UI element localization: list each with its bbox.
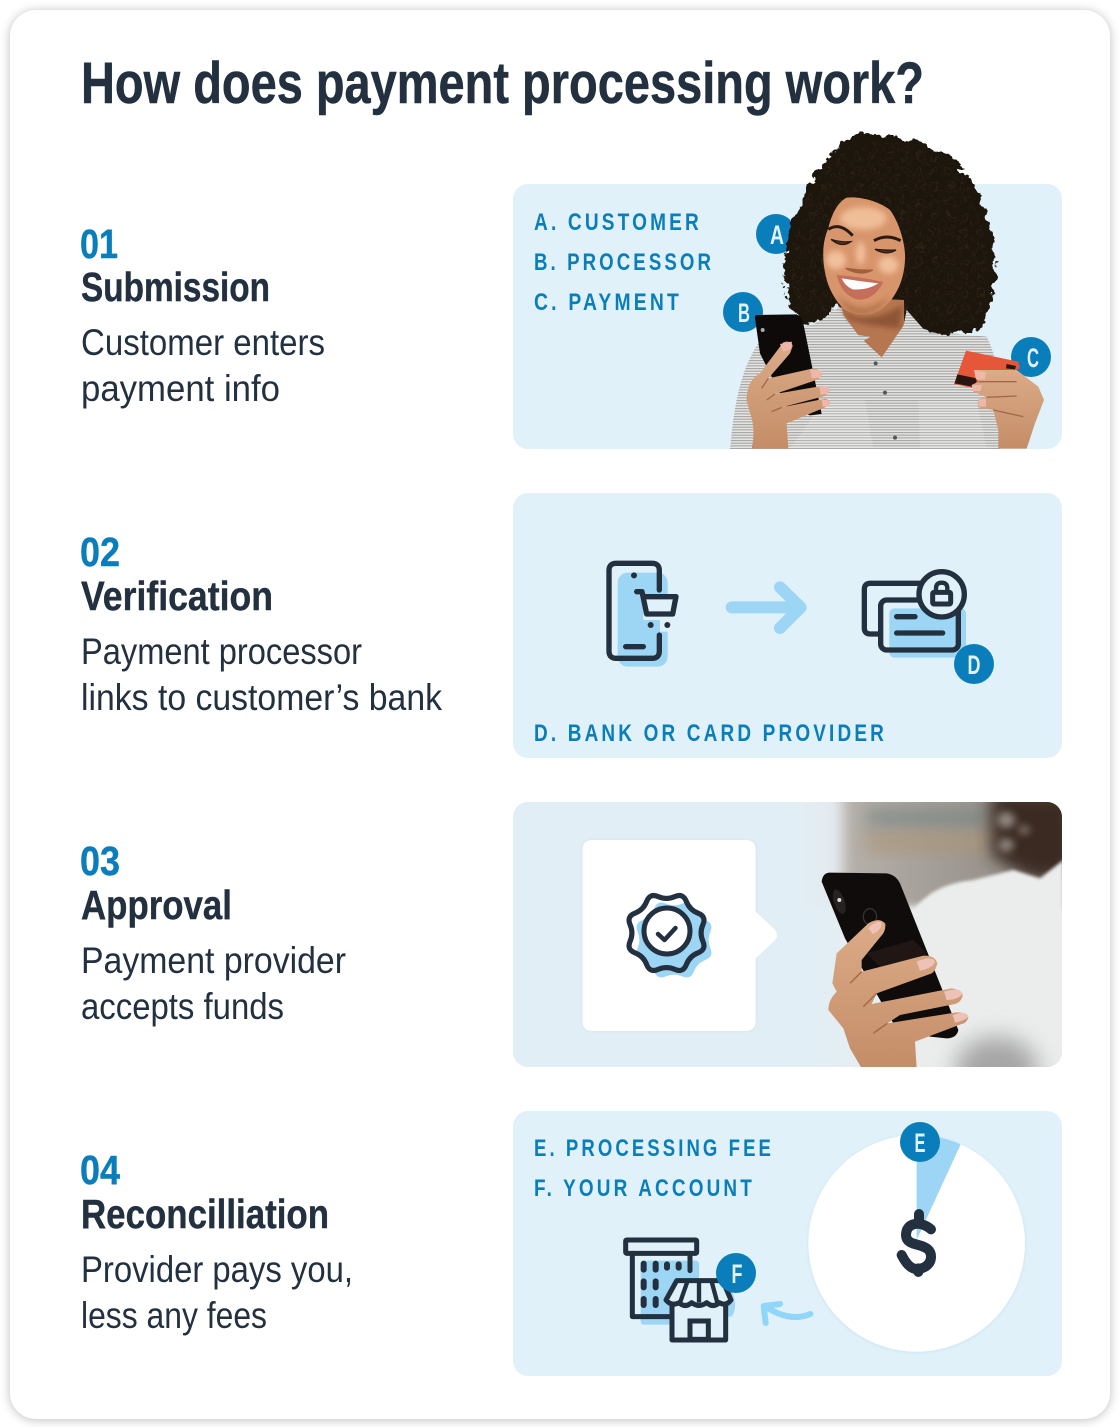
icon: phone with shopping cart	[609, 563, 677, 667]
icon: approval badge	[629, 896, 711, 977]
photo: woman with phone and card	[730, 135, 1044, 450]
step 04 text block: Provider pays you,	[81, 1249, 353, 1290]
marker E	[900, 1122, 940, 1162]
woman: chin shade	[837, 293, 890, 316]
marker B	[723, 292, 763, 332]
shirt shadow	[944, 1024, 1050, 1067]
woman: collar	[830, 306, 924, 341]
panel: approval with phone photo	[513, 802, 1062, 1067]
shirt buttons	[874, 361, 897, 440]
marker B: B	[738, 298, 750, 328]
step 02 text block	[80, 529, 442, 718]
marker D	[954, 644, 994, 684]
panel: customer, processor, payment	[513, 135, 1062, 450]
woman: neck shadow	[840, 305, 903, 328]
step 01 text block: 01	[80, 221, 118, 267]
woman: eye right	[875, 249, 896, 253]
woman: eye left	[831, 239, 851, 245]
woman: hair curl texture	[790, 142, 989, 327]
pie chart	[808, 1135, 1025, 1352]
step 03 text block: Payment provider	[81, 940, 346, 981]
icon: dollar sign	[902, 1214, 931, 1272]
right hand	[972, 370, 1044, 449]
woman: nose highlight	[856, 242, 865, 265]
pie shadow	[807, 1135, 1026, 1353]
step 04 text block	[80, 1147, 353, 1336]
marker C: C	[1027, 343, 1039, 373]
white shirt	[913, 860, 1063, 1073]
pie wedge: fee	[917, 1135, 961, 1240]
hand	[828, 920, 968, 1068]
woman: left cheek highlight	[826, 251, 846, 269]
woman: brow left	[828, 227, 853, 236]
step 02 text block: Verification	[81, 573, 273, 619]
hair	[990, 793, 1074, 878]
title: How does payment processing work?	[81, 51, 924, 116]
marker A	[756, 214, 796, 254]
legend: E F	[534, 1135, 774, 1202]
hair highlights	[998, 812, 1029, 852]
icon: office and storefront	[626, 1240, 735, 1340]
legend: A B C: A. CUSTOMER	[534, 209, 702, 236]
step 03 text block: accepts funds	[81, 986, 284, 1027]
woman: hair	[784, 135, 995, 334]
step 02 text block: links to customer’s bank	[81, 677, 442, 718]
legend: D: D. BANK OR CARD PROVIDER	[534, 720, 887, 747]
step 01 text block	[80, 221, 325, 409]
step 01 text block: Submission	[81, 264, 270, 310]
marker A: A	[770, 220, 784, 250]
step 03 text block	[80, 838, 346, 1027]
step 04 text block: less any fees	[81, 1295, 267, 1336]
woman: forehead highlight	[840, 207, 887, 230]
woman: nose shadow	[846, 268, 873, 273]
legend: A B C: B. PROCESSOR	[534, 249, 714, 276]
step 03 text block: 03	[80, 838, 120, 884]
left hand	[747, 342, 830, 449]
credit card	[954, 351, 1020, 388]
curved arrow to account	[764, 1304, 810, 1323]
step 01 text block: Customer enters	[81, 322, 325, 363]
icon: locked bank cards	[864, 572, 966, 658]
woman: face	[823, 197, 905, 315]
marker D: D	[968, 650, 980, 680]
woman: right cheek highlight	[878, 256, 898, 274]
step 03 text block: Approval	[81, 882, 232, 928]
callout bubble shadow	[582, 840, 756, 1031]
marker E: E	[914, 1128, 926, 1158]
woman: lips	[837, 275, 883, 300]
woman: shirt	[730, 307, 1000, 450]
callout bubble	[582, 840, 777, 1031]
legend: E F: F. YOUR ACCOUNT	[534, 1175, 755, 1202]
photo background	[832, 802, 1062, 911]
step 04 text block: 04	[80, 1147, 120, 1193]
phone	[822, 873, 958, 1038]
arrow	[732, 587, 801, 628]
step 02 text block: 02	[80, 529, 120, 575]
step 01 text block: payment info	[81, 368, 280, 409]
legend: E F: E. PROCESSING FEE	[534, 1135, 774, 1162]
woman: neck	[839, 297, 904, 357]
marker F	[716, 1253, 756, 1293]
legend: A B C	[534, 209, 714, 316]
marker C	[1011, 337, 1051, 377]
woman: brow right	[874, 237, 901, 241]
step 04 text block: Reconcilliation	[81, 1191, 329, 1237]
background tan band	[867, 832, 992, 852]
woman: teeth	[842, 278, 878, 290]
background teal band	[867, 808, 988, 828]
panel: bank or card provider	[513, 493, 1062, 758]
marker F: F	[732, 1259, 742, 1289]
panel: processing fee and your account	[513, 1111, 1062, 1376]
phone	[755, 314, 822, 415]
woman: pockets	[790, 399, 987, 448]
step 02 text block: Payment processor	[81, 631, 362, 672]
legend: A B C: C. PAYMENT	[534, 289, 682, 316]
photo lower background	[908, 902, 919, 914]
